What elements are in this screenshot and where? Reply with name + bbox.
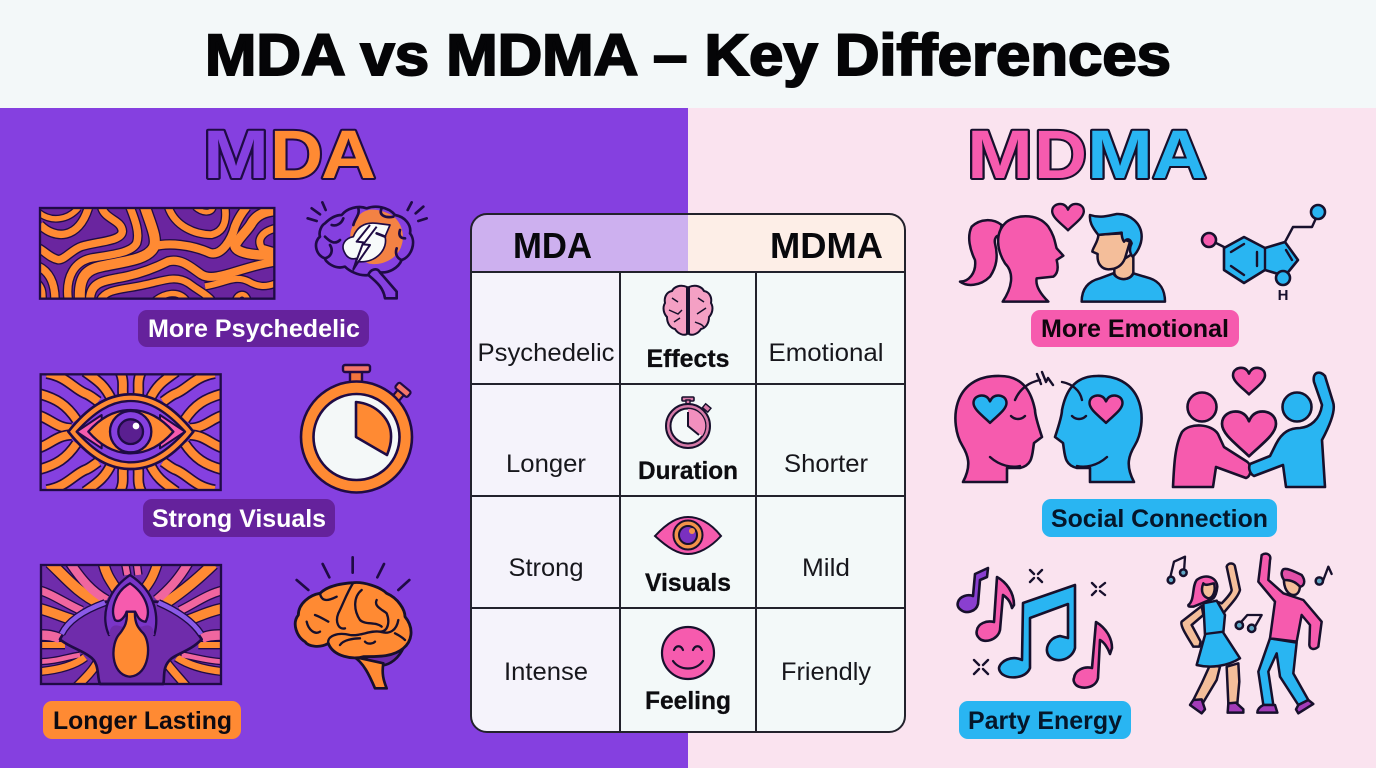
table grid bbox=[471, 272, 905, 732]
icon: dancing couple bbox=[1168, 554, 1332, 713]
heading: MDA: M bbox=[203, 116, 269, 193]
icon: molecule bbox=[1202, 205, 1325, 304]
title: MDA vs MDMA – Key Differences bbox=[205, 23, 1171, 88]
icon: small stopwatch bbox=[666, 397, 711, 448]
icon: two heads with hearts bbox=[955, 372, 1142, 482]
icon: orange brain bbox=[295, 557, 411, 688]
label: Strong Visuals bbox=[143, 499, 335, 537]
heading: MDA: A bbox=[321, 116, 376, 193]
icon: friends sharing heart bbox=[1173, 368, 1334, 487]
heading: MDMA bbox=[967, 116, 1207, 193]
row: Effects bbox=[478, 286, 884, 373]
label: More Emotional bbox=[1031, 310, 1239, 347]
woman silhouette bbox=[960, 216, 1063, 302]
row: Effects: Effects bbox=[646, 345, 730, 373]
row: Feeling: Feeling bbox=[645, 687, 731, 715]
woman dancing bbox=[1181, 564, 1243, 713]
row: Duration: Shorter bbox=[784, 450, 868, 478]
label: Social Connection bbox=[1042, 499, 1277, 537]
label: More Psychedelic bbox=[138, 310, 369, 347]
icon: molecule: H bbox=[1278, 287, 1288, 304]
panel: comparison table bbox=[471, 214, 905, 732]
header: MDMA: MDMA bbox=[770, 225, 883, 266]
row: Effects: Psychedelic bbox=[478, 339, 614, 367]
label: Longer Lasting: Longer Lasting bbox=[53, 707, 232, 735]
heading: MDMA: M bbox=[1087, 116, 1153, 193]
row: Feeling bbox=[504, 627, 872, 715]
table outline bbox=[471, 214, 905, 732]
table body background bbox=[471, 214, 905, 732]
label: More Psychedelic: More Psychedelic bbox=[148, 315, 360, 343]
label: Strong Visuals: Strong Visuals bbox=[152, 505, 326, 533]
icon: couple with heart bbox=[960, 204, 1165, 302]
icon: top-down brain bbox=[664, 286, 712, 335]
label: Longer Lasting bbox=[43, 701, 241, 739]
man bbox=[1082, 214, 1165, 302]
icon: smiley bbox=[662, 627, 714, 679]
row: Visuals: Mild bbox=[802, 554, 850, 582]
heading: MDMA: D bbox=[1034, 116, 1087, 193]
header: MDA: MDA bbox=[513, 225, 592, 266]
header band bbox=[0, 0, 1376, 108]
icon: pink eye bbox=[655, 517, 721, 554]
icon: stopwatch bbox=[301, 365, 412, 492]
row: Feeling: Intense bbox=[504, 658, 588, 686]
man dancing bbox=[1257, 554, 1322, 713]
row: Visuals bbox=[508, 517, 850, 597]
row: Effects: Emotional bbox=[768, 339, 884, 367]
panel: MDA background bbox=[0, 108, 688, 768]
row: Visuals: Visuals bbox=[645, 569, 731, 597]
label: Party Energy: Party Energy bbox=[968, 707, 1122, 735]
label: Party Energy bbox=[959, 701, 1131, 739]
table header: MDMA side bbox=[688, 214, 905, 272]
icon: brain with lightning bbox=[308, 202, 427, 298]
icon: music notes bbox=[958, 568, 1112, 688]
table left column tint bbox=[471, 272, 620, 732]
music notes around dancers bbox=[1168, 557, 1332, 632]
illustration: psychedelic rays and figure bbox=[38, 563, 224, 687]
table header: MDA side bbox=[471, 214, 688, 272]
row: Duration: Longer bbox=[506, 450, 586, 478]
heading: MDA bbox=[203, 116, 376, 193]
heading: MDMA: A bbox=[1152, 116, 1207, 193]
row: Visuals: Strong bbox=[508, 554, 584, 582]
row: Duration bbox=[506, 397, 868, 485]
row: Duration: Duration bbox=[638, 457, 738, 485]
heading: MDA: D bbox=[270, 116, 323, 193]
row: Feeling: Friendly bbox=[781, 658, 872, 686]
label: Social Connection: Social Connection bbox=[1051, 505, 1268, 533]
illustration: psychedelic eye bbox=[37, 372, 224, 492]
label: More Emotional: More Emotional bbox=[1041, 315, 1229, 343]
heading: MDMA: M bbox=[967, 116, 1033, 193]
panel: MDMA background bbox=[688, 108, 1376, 768]
illustration: wavy psychedelic pattern bbox=[38, 207, 277, 300]
